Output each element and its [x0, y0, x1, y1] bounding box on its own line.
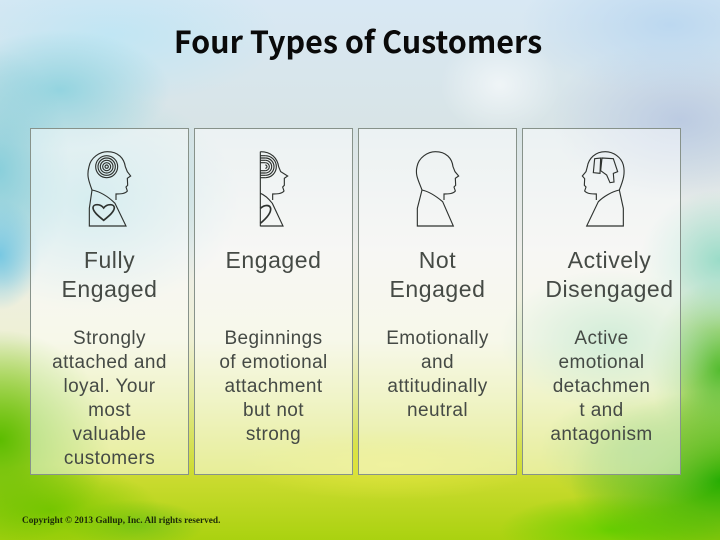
description: Actively Disengaged: t and — [579, 400, 624, 421]
icon: plain head outline — [416, 151, 460, 227]
heading: Fully Engaged: Fully — [84, 247, 135, 273]
panel: not engaged — [358, 128, 517, 475]
description: Not Engaged: attitudinally — [387, 376, 488, 397]
description: Fully Engaged: customers — [64, 448, 155, 469]
heading: Fully Engaged: Engaged — [62, 276, 157, 302]
description: Engaged: strong — [246, 424, 301, 445]
panel: fully engaged — [30, 128, 189, 475]
description: Fully Engaged: valuable — [72, 424, 146, 445]
description: Actively Disengaged — [550, 328, 653, 445]
heading: Actively Disengaged — [545, 247, 674, 302]
description: Fully Engaged: loyal. Your — [63, 376, 156, 397]
description: Not Engaged — [386, 328, 489, 421]
description: Engaged: but not — [243, 400, 304, 421]
description: Not Engaged: neutral — [407, 400, 468, 421]
heading: Actively Disengaged: Disengaged — [545, 276, 674, 302]
icon: head facing left with thumbs down brain — [582, 151, 625, 227]
heading: Not Engaged: Not — [419, 247, 456, 273]
icon: half head with half spiral and half heart — [260, 151, 289, 227]
title: Four Types of Customers — [174, 18, 542, 62]
description: Fully Engaged: attached and — [52, 352, 167, 373]
heading: Not Engaged — [390, 247, 485, 302]
panel: actively disengaged — [522, 128, 681, 475]
description: Not Engaged: and — [421, 352, 454, 373]
heading: Not Engaged: Engaged — [390, 276, 485, 302]
description: Fully Engaged: Strongly — [73, 328, 146, 349]
heading: Fully Engaged — [62, 247, 157, 302]
description: Engaged: of emotional — [219, 352, 328, 373]
description: Actively Disengaged: detachmen — [553, 376, 650, 397]
description: Actively Disengaged: antagonism — [550, 424, 653, 445]
description: Engaged: Beginnings — [224, 328, 323, 349]
description: Actively Disengaged: emotional — [558, 352, 644, 373]
icon: head with spiral brain and heart — [87, 151, 132, 227]
heading: Engaged: Engaged — [226, 247, 321, 273]
panel: engaged — [194, 128, 353, 475]
description: Fully Engaged: most — [88, 400, 131, 421]
heading: Actively Disengaged: Actively — [568, 247, 651, 273]
description: Engaged: attachment — [224, 376, 322, 397]
description: Fully Engaged — [52, 328, 167, 469]
description: Engaged — [219, 328, 328, 445]
description: Actively Disengaged: Active — [574, 328, 629, 349]
description: Not Engaged: Emotionally — [386, 328, 489, 349]
copyright: Copyright © 2013 Gallup, Inc. All rights reserved. — [22, 516, 220, 526]
